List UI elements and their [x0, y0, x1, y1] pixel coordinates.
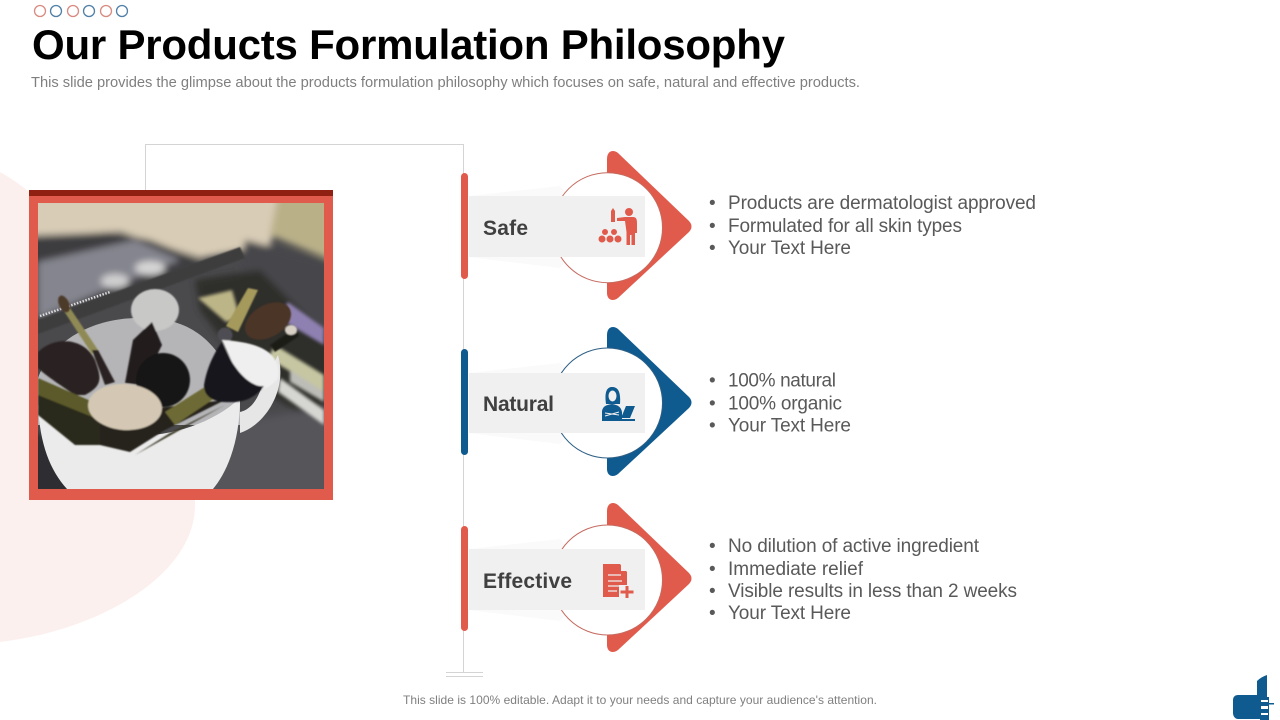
- brushes: [38, 288, 299, 455]
- photo frame: [29, 190, 335, 500]
- label fade: safe: [469, 186, 570, 268]
- decorative circles: [34, 6, 128, 16]
- row: Natural: [461, 327, 692, 476]
- cup: [38, 318, 240, 425]
- bullets: Effective: [709, 536, 1017, 624]
- label band: effective: [469, 549, 645, 610]
- bullets: Effective: •: [709, 603, 716, 624]
- bullets: Effective: •: [709, 581, 716, 602]
- label: Safe: Safe: [483, 217, 528, 240]
- circle: safe: [552, 173, 662, 283]
- bullets: Natural: 100% organic: [728, 394, 842, 414]
- circle: natural: [552, 348, 662, 458]
- icon: document with plus: [603, 564, 634, 598]
- background blob: [0, 172, 195, 642]
- arrow shape: effective: [607, 503, 692, 652]
- title: Our Products Formulation Philosophy: [32, 21, 786, 68]
- bullets: Natural: 100% natural: [728, 370, 836, 392]
- connector lines: [146, 144, 483, 676]
- label: Effective: Effective: [483, 570, 572, 593]
- bullets: Natural: •: [709, 370, 716, 392]
- bullets: Natural: •: [709, 416, 716, 436]
- bullets: Safe: Products are dermatologist approved: [728, 193, 1036, 214]
- row: Effective: [461, 503, 692, 652]
- icon: thumbs up with lipstick: [1233, 675, 1274, 720]
- bullets: Effective: No dilution of active ingredient: [728, 536, 980, 557]
- bullets: Safe: [709, 193, 1036, 259]
- bullets: Effective: •: [709, 536, 716, 557]
- marker bar: effective: [461, 526, 468, 631]
- circle: effective: [552, 525, 662, 635]
- bullets: Natural: •: [709, 394, 716, 414]
- bullets: Effective: Visible results in less than 2 weeks: [728, 581, 1017, 602]
- bullets: Safe: Your Text Here: [728, 238, 851, 259]
- bullets: Natural: Your Text Here: [728, 416, 851, 436]
- bullets: Natural: [709, 370, 851, 436]
- subtitle: This slide provides the glimpse about the products formulation philosophy which focuses on safe, natural and effective products.: [31, 75, 860, 91]
- marker bar: safe: [461, 173, 468, 279]
- bullets: Safe: Formulated for all skin types: [728, 216, 962, 237]
- footer note: This slide is 100% editable. Adapt it to your needs and capture your audience's attention.: [403, 693, 877, 707]
- icon: woman at laptop: [602, 387, 635, 421]
- arrow shape: safe: [607, 151, 692, 300]
- label fade: natural: [469, 363, 570, 444]
- bullets: Effective: Immediate relief: [728, 559, 864, 580]
- label: Natural: Natural: [483, 393, 554, 416]
- arrow shape: natural: [607, 327, 692, 476]
- bullets: Safe: •: [709, 193, 716, 214]
- icon: presenter with stacked spheres: [598, 208, 637, 245]
- row: Safe: [461, 151, 692, 300]
- bullets: Safe: •: [709, 216, 716, 237]
- bullets: Effective: •: [709, 559, 716, 580]
- bullets: Effective: Your Text Here: [728, 603, 851, 624]
- marker bar: natural: [461, 349, 468, 455]
- photo: makeup brushes in a cup: [38, 203, 324, 489]
- label band: natural: [469, 373, 645, 433]
- label fade: effective: [469, 539, 570, 621]
- bullets: Safe: •: [709, 238, 716, 259]
- label band: safe: [469, 196, 645, 257]
